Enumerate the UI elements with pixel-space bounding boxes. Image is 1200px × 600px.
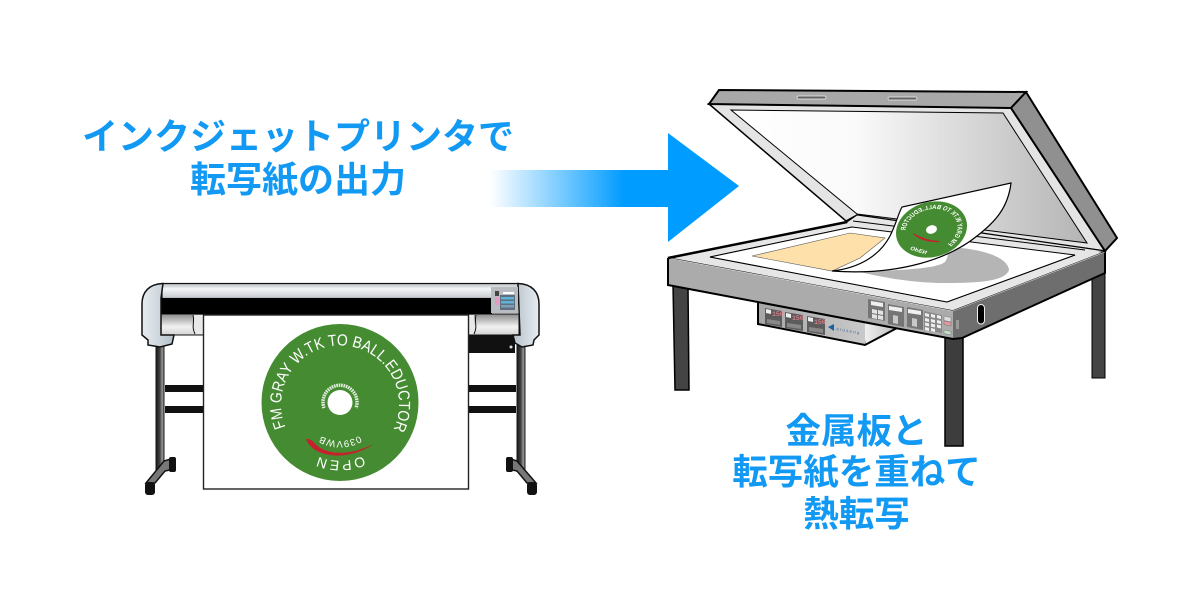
press open lid — [709, 90, 1117, 302]
transfer paper — [204, 315, 468, 489]
printed disc: 039VWB — [320, 436, 362, 448]
temperature display 1: 150 — [772, 311, 784, 318]
mirrored disc on transfer paper: FM GRAY W.TK TO BALL.EDUCTOR — [900, 204, 963, 246]
printed disc — [262, 324, 418, 481]
heading: heat transfer step: 転写紙を重ねて — [732, 452, 981, 492]
printer control panel — [491, 287, 518, 313]
temperature display 2: 150 — [792, 315, 804, 322]
control box — [758, 302, 897, 345]
printer stand legs — [145, 340, 537, 495]
peeling transfer paper — [832, 183, 1011, 272]
printed disc: OPEN — [316, 457, 364, 470]
heading: inkjet printer output: 転写紙の出力 — [190, 159, 406, 200]
illustration: large format inkjet printer — [141, 282, 540, 495]
temperature display 3: 150 — [814, 319, 826, 326]
metal plate — [752, 233, 885, 271]
illustration: heat press — [667, 89, 1118, 447]
heading: heat transfer step: 金属板と — [785, 411, 928, 451]
logo: arosena — [836, 326, 861, 336]
press legs — [673, 270, 1105, 446]
front control panels — [868, 299, 951, 335]
printed disc: FM GRAY W.TK TO BALL.EDUCTOR — [270, 334, 410, 432]
mirrored disc on transfer paper: OPEN — [910, 245, 929, 254]
press base — [668, 222, 1105, 339]
mirrored disc on transfer paper — [896, 201, 967, 258]
side tab — [956, 320, 959, 329]
arrow — [490, 133, 739, 242]
heading: heat transfer step: 熱転写 — [803, 494, 910, 534]
keypad — [924, 311, 942, 333]
printer body — [142, 284, 539, 353]
heading: inkjet printer output: インクジェットプリンタで — [82, 116, 514, 157]
paper shadow — [860, 248, 1009, 283]
right side slot — [978, 304, 984, 324]
